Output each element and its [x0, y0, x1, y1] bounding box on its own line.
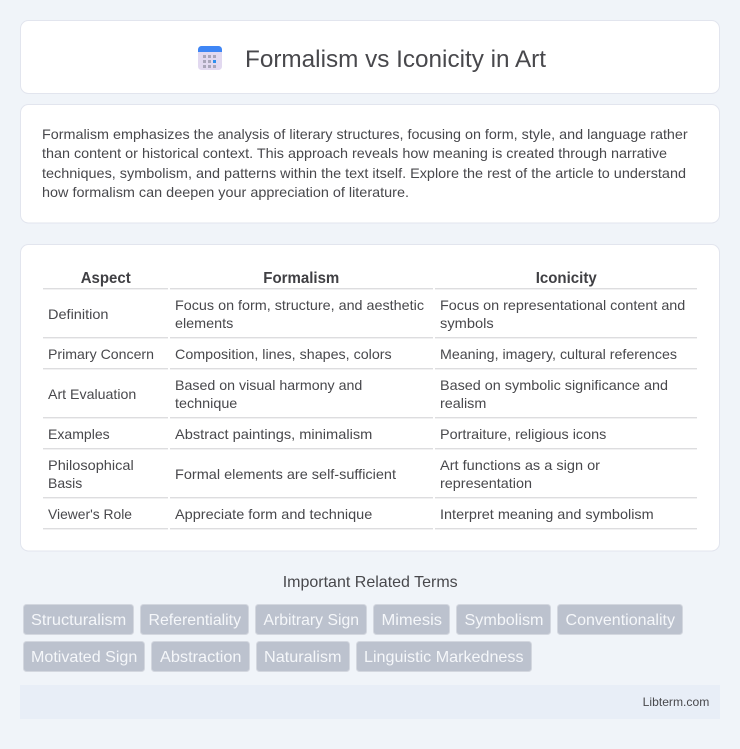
table row: Viewer's Role	[48, 506, 654, 522]
table row: Art Evaluation	[48, 377, 668, 411]
table row: Definition: Definition	[48, 306, 108, 322]
table row: Definition	[48, 297, 685, 331]
table row: Philosophical Basis: Basis	[48, 475, 82, 491]
text block: introduction paragraph: than content or historical context. This approach reveals how meaning is created through narrative	[42, 145, 667, 161]
table row: Definition: symbols	[440, 315, 494, 331]
title: Formalism vs Iconicity in Art	[245, 46, 546, 73]
table row: Examples: Portraiture, religious icons	[440, 426, 606, 442]
table row: Examples: Examples	[48, 426, 110, 442]
table row: Philosophical Basis: Philosophical	[48, 457, 134, 473]
icon: calendar grid	[198, 46, 222, 70]
table row: Philosophical Basis: representation	[440, 475, 532, 491]
tag list: related terms: Referentiality	[148, 612, 241, 629]
table row: Philosophical Basis	[48, 457, 600, 491]
table row: Art Evaluation: Based on symbolic significance and	[440, 377, 668, 393]
footer bar	[20, 685, 720, 719]
table header row: Formalism	[263, 270, 339, 287]
table row: Viewer's Role: Viewer's Role	[48, 506, 132, 522]
tag list: related terms: Abstraction	[160, 649, 242, 666]
table row: Definition: Focus on form, structure, and aesthetic	[175, 297, 424, 313]
table row: Primary Concern	[48, 346, 677, 362]
table row: Art Evaluation: Art Evaluation	[48, 386, 136, 402]
table row: Viewer's Role: Interpret meaning and symbolism	[440, 506, 654, 522]
table row: Philosophical Basis: Formal elements are self-sufficient	[175, 466, 396, 482]
tag list: related terms	[24, 604, 682, 672]
table row: Definition: elements	[175, 315, 233, 331]
table row: Art Evaluation: realism	[440, 395, 486, 411]
tag list: related terms: Symbolism	[464, 612, 544, 629]
panel: comparison table	[20, 244, 720, 551]
text block: introduction paragraph: Formalism emphasizes the analysis of literary structures, focusing on form, style, and language rather	[42, 126, 688, 142]
panel: header	[20, 20, 720, 94]
table row: Examples: Abstract paintings, minimalism	[175, 426, 372, 442]
text block: introduction paragraph: how formalism can deepen your appreciation of literature.	[42, 184, 409, 200]
table row: Primary Concern: Meaning, imagery, cultural references	[440, 346, 677, 362]
text block: introduction paragraph	[42, 126, 688, 200]
table row: Viewer's Role: Appreciate form and technique	[175, 506, 373, 522]
tag list: related terms: Naturalism	[264, 649, 342, 666]
table header row	[81, 270, 597, 287]
text block: introduction paragraph: techniques, symbolism, and patterns within the text itself. Explore the rest of the article to understand	[42, 165, 686, 181]
table row: Primary Concern: Composition, lines, shapes, colors	[175, 346, 392, 362]
heading: important related terms: Important Related Terms	[283, 574, 458, 591]
table row: Definition: Focus on representational content and	[440, 297, 685, 313]
table header row: Iconicity	[536, 270, 597, 287]
tag list: related terms: Structuralism	[31, 612, 126, 629]
tag list: related terms: Conventionality	[566, 612, 675, 629]
table row: Philosophical Basis: Art functions as a sign or	[440, 457, 600, 473]
tag list: related terms: Mimesis	[382, 612, 442, 629]
tag list: related terms: Arbitrary Sign	[264, 612, 359, 629]
table row: Primary Concern: Primary Concern	[48, 346, 154, 362]
table row: Art Evaluation: technique	[175, 395, 238, 411]
table header row: Aspect	[81, 270, 131, 287]
tag list: related terms: Motivated Sign	[31, 649, 137, 666]
table row: Art Evaluation: Based on visual harmony and	[175, 377, 362, 393]
footer credit: Libterm.com	[643, 695, 709, 709]
tag list: related terms: Linguistic Markedness	[364, 649, 524, 666]
panel: introduction	[20, 104, 720, 223]
table row: Examples	[48, 426, 606, 442]
